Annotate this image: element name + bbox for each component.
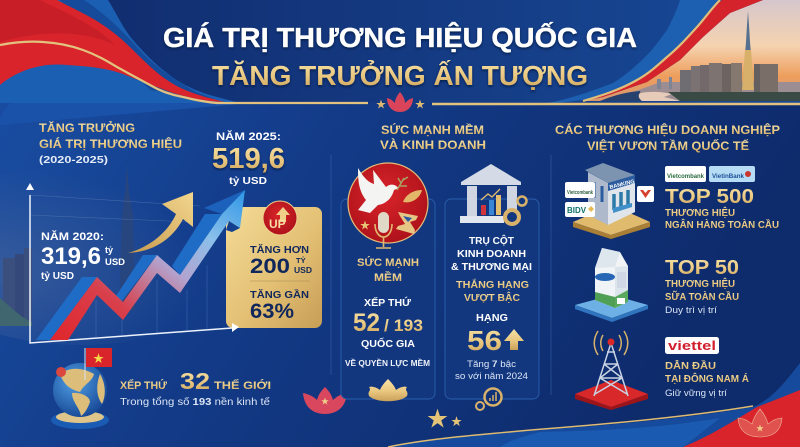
stat: top 50 dairy: THƯƠNG HIỆU xyxy=(665,277,735,290)
faint skyline behind chart xyxy=(0,165,250,345)
section heading: soft power and business xyxy=(380,124,486,152)
section heading: brand value growth: GIÁ TRỊ THƯƠNG HIỆU xyxy=(39,138,182,151)
panel: soft power: MỀM xyxy=(374,271,402,284)
panel: business pillar: so với năm 2024 xyxy=(455,371,528,382)
stat: top 50 dairy: SỮA TOÀN CẦU xyxy=(665,290,739,303)
panel: business pillar xyxy=(445,164,539,410)
icon: dove and culture medallion xyxy=(348,163,428,248)
icon: pink lotus xyxy=(303,387,347,414)
icon: banking building: BIDV xyxy=(567,205,586,215)
section heading: soft power and business: VÀ KINH DOANH xyxy=(380,139,486,152)
brand logo: Viettel xyxy=(665,337,719,354)
brand logos: Vietcombank and VietinBank: VietinBank xyxy=(712,173,744,180)
panel: business pillar: HẠNG xyxy=(476,313,508,324)
stat: southeast asia leader: TẠI ĐÔNG NAM Á xyxy=(665,372,749,385)
gold stat panel: 63% xyxy=(250,300,294,323)
header lotus ornament: ★ xyxy=(415,100,425,111)
icon: banking building: BANKING xyxy=(609,179,635,191)
icon: banking building: Vietcombank xyxy=(567,190,593,196)
label: year 2020 value: NĂM 2020: xyxy=(41,230,104,243)
ranking: 32nd in the world: Trong tổng số 193 nền kinh tế xyxy=(120,396,270,408)
section heading: brand value growth xyxy=(39,122,182,166)
ranking: 32nd in the world: 32 xyxy=(180,368,210,394)
header left ribbons xyxy=(0,0,368,125)
icon: footer lotus: ★ xyxy=(756,424,764,433)
brand logos: Vietcombank and VietinBank xyxy=(665,166,755,182)
stat: southeast asia leader xyxy=(665,359,749,398)
stat: top 50 dairy xyxy=(665,257,760,324)
label: year 2020 value: USD xyxy=(105,257,126,267)
section heading: international brands xyxy=(555,124,780,153)
icon: banking building xyxy=(565,163,654,239)
panel: business pillar: VƯỢT BẬC xyxy=(464,291,520,304)
stat: top 500 banks: NGÂN HÀNG TOÀN CẦU xyxy=(665,218,779,231)
header lotus ornament xyxy=(376,92,425,112)
icon: dove and culture medallion: ★ xyxy=(360,221,370,232)
label: year 2025 value: tỷ USD xyxy=(229,175,267,187)
label: year 2020 value xyxy=(41,230,126,282)
section heading: soft power and business: SỨC MẠNH MỀM xyxy=(381,124,484,137)
line chart with axes and arrows xyxy=(26,183,245,343)
icon: globe with flag: ★ xyxy=(93,353,104,365)
gold stat panel: USD xyxy=(294,266,312,275)
section divider lines xyxy=(331,155,551,395)
section heading: international brands: CÁC THƯƠNG HIỆU DOANH NGHIỆP xyxy=(555,124,780,137)
label: year 2020 value: 319,6 xyxy=(41,243,101,270)
gold stat panel xyxy=(226,201,322,328)
header background band xyxy=(0,0,800,103)
title line 1: GIÁ TRỊ THƯƠNG HIỆU QUỐC GIA xyxy=(163,21,637,53)
panel: soft power: XẾP THỨ xyxy=(364,296,412,309)
ranking: 32nd in the world: XẾP THỨ xyxy=(120,379,168,392)
ranking: 32nd in the world xyxy=(108,368,300,414)
icon: bank with chart and gears xyxy=(460,164,526,224)
label: year 2025 value xyxy=(212,130,285,187)
panel: soft power: / 193 xyxy=(384,316,423,335)
stat: southeast asia leader: Giữ vững vị trí xyxy=(665,388,728,398)
icon: telecom tower xyxy=(575,331,648,410)
icon: globe with flag xyxy=(51,348,112,429)
panel: soft power: QUỐC GIA xyxy=(361,336,415,350)
panel: business pillar: THẮNG HẠNG xyxy=(456,278,529,291)
stat: top 500 banks xyxy=(665,186,779,241)
bottom ribbon xyxy=(388,363,800,447)
panel: business pillar: TRỤ CỘT xyxy=(469,234,514,247)
decorative stars: ★ xyxy=(427,408,448,431)
stat: southeast asia leader: DẪN ĐẦU xyxy=(665,359,716,372)
icon: pink lotus: ★ xyxy=(321,397,329,406)
section heading: brand value growth: TĂNG TRƯỞNG xyxy=(39,122,135,135)
panel: business pillar: 56 xyxy=(467,325,502,356)
label: year 2025 value: 519,6 xyxy=(212,143,285,175)
label: year 2025 value: NĂM 2025: xyxy=(216,130,281,143)
decorative stars xyxy=(427,408,462,431)
header right city photo xyxy=(432,0,800,104)
label: year 2020 value: tỷ xyxy=(105,245,113,255)
icon: gears with chart xyxy=(476,388,502,410)
stat: top 50 dairy: TOP 50 xyxy=(665,257,739,279)
panel: soft power: 52 xyxy=(353,309,380,337)
panel: soft power xyxy=(341,163,435,401)
icon: up arrow xyxy=(504,329,524,350)
brand logo: Viettel: viettel xyxy=(668,339,716,353)
header lotus ornament: ★ xyxy=(376,100,386,111)
zigzag growth arrow front xyxy=(50,190,245,340)
icon: up badge: UP xyxy=(269,217,286,231)
panel: business pillar: Tăng 7 bậc xyxy=(467,359,516,370)
brand logos: Vietcombank and VietinBank: Vietcombank xyxy=(667,173,704,180)
stat: top 500 banks: TOP 500 xyxy=(665,186,754,208)
gold stat panel: TĂNG GẦN xyxy=(250,288,309,301)
zigzag arrow side bands xyxy=(36,214,222,340)
decorative stars: ★ xyxy=(451,416,462,428)
section heading: brand value growth: (2020-2025) xyxy=(39,154,108,166)
panel: business pillar: KINH DOANH xyxy=(457,249,526,260)
panel: business pillar: & THƯƠNG MẠI xyxy=(451,262,532,273)
stat: top 500 banks: THƯƠNG HIỆU xyxy=(665,206,735,219)
gold stat panel: TỶ xyxy=(296,256,306,265)
icon: milk carton xyxy=(575,248,648,322)
ranking: 32nd in the world: THẾ GIỚI xyxy=(214,379,271,392)
icon: footer lotus xyxy=(738,409,782,437)
title line 2: TĂNG TRƯỞNG ẤN TƯỢNG xyxy=(212,59,588,91)
section heading: international brands: VIỆT VƯƠN TẦM QUỐC TẾ xyxy=(587,139,749,153)
gold stat panel: TĂNG HƠN xyxy=(250,243,309,256)
icon: gold lotus xyxy=(369,379,407,401)
panel: soft power: VỀ QUYỀN LỰC MỀM xyxy=(345,358,430,368)
label: year 2020 value: tỷ USD xyxy=(41,271,74,282)
gold stat panel: 200 xyxy=(250,255,290,278)
panel: soft power: SỨC MẠNH xyxy=(357,256,419,269)
gold growth arrow xyxy=(128,192,193,253)
stat: top 50 dairy: Duy trì vị trí xyxy=(665,305,718,315)
